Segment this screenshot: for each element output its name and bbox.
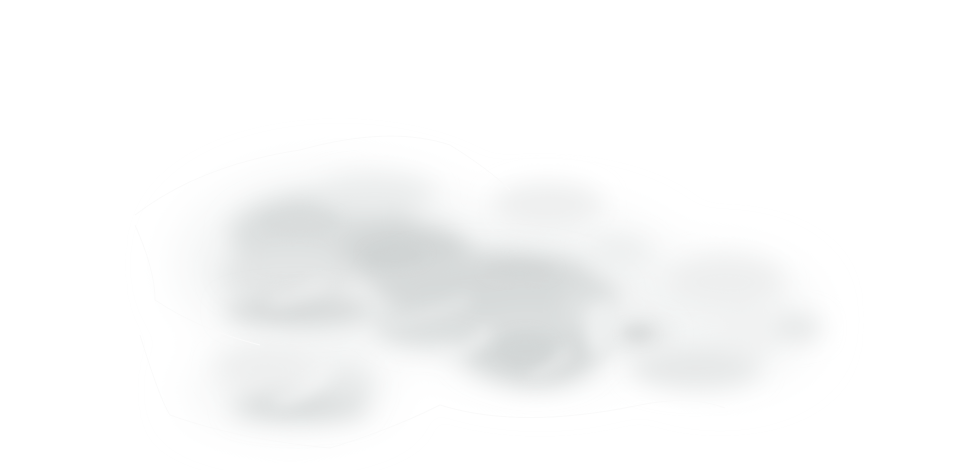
cloud: lower left puff [215, 346, 375, 420]
cloud: right puffs [590, 238, 821, 388]
cloud: faint contour lines [135, 136, 725, 448]
cloud: light highlights [270, 282, 612, 402]
cloud: central dark band [225, 251, 668, 386]
cloud: upper left mass [220, 175, 603, 300]
cloud: darker core wisps [260, 208, 652, 368]
cloud: faint outer haze [180, 175, 810, 425]
